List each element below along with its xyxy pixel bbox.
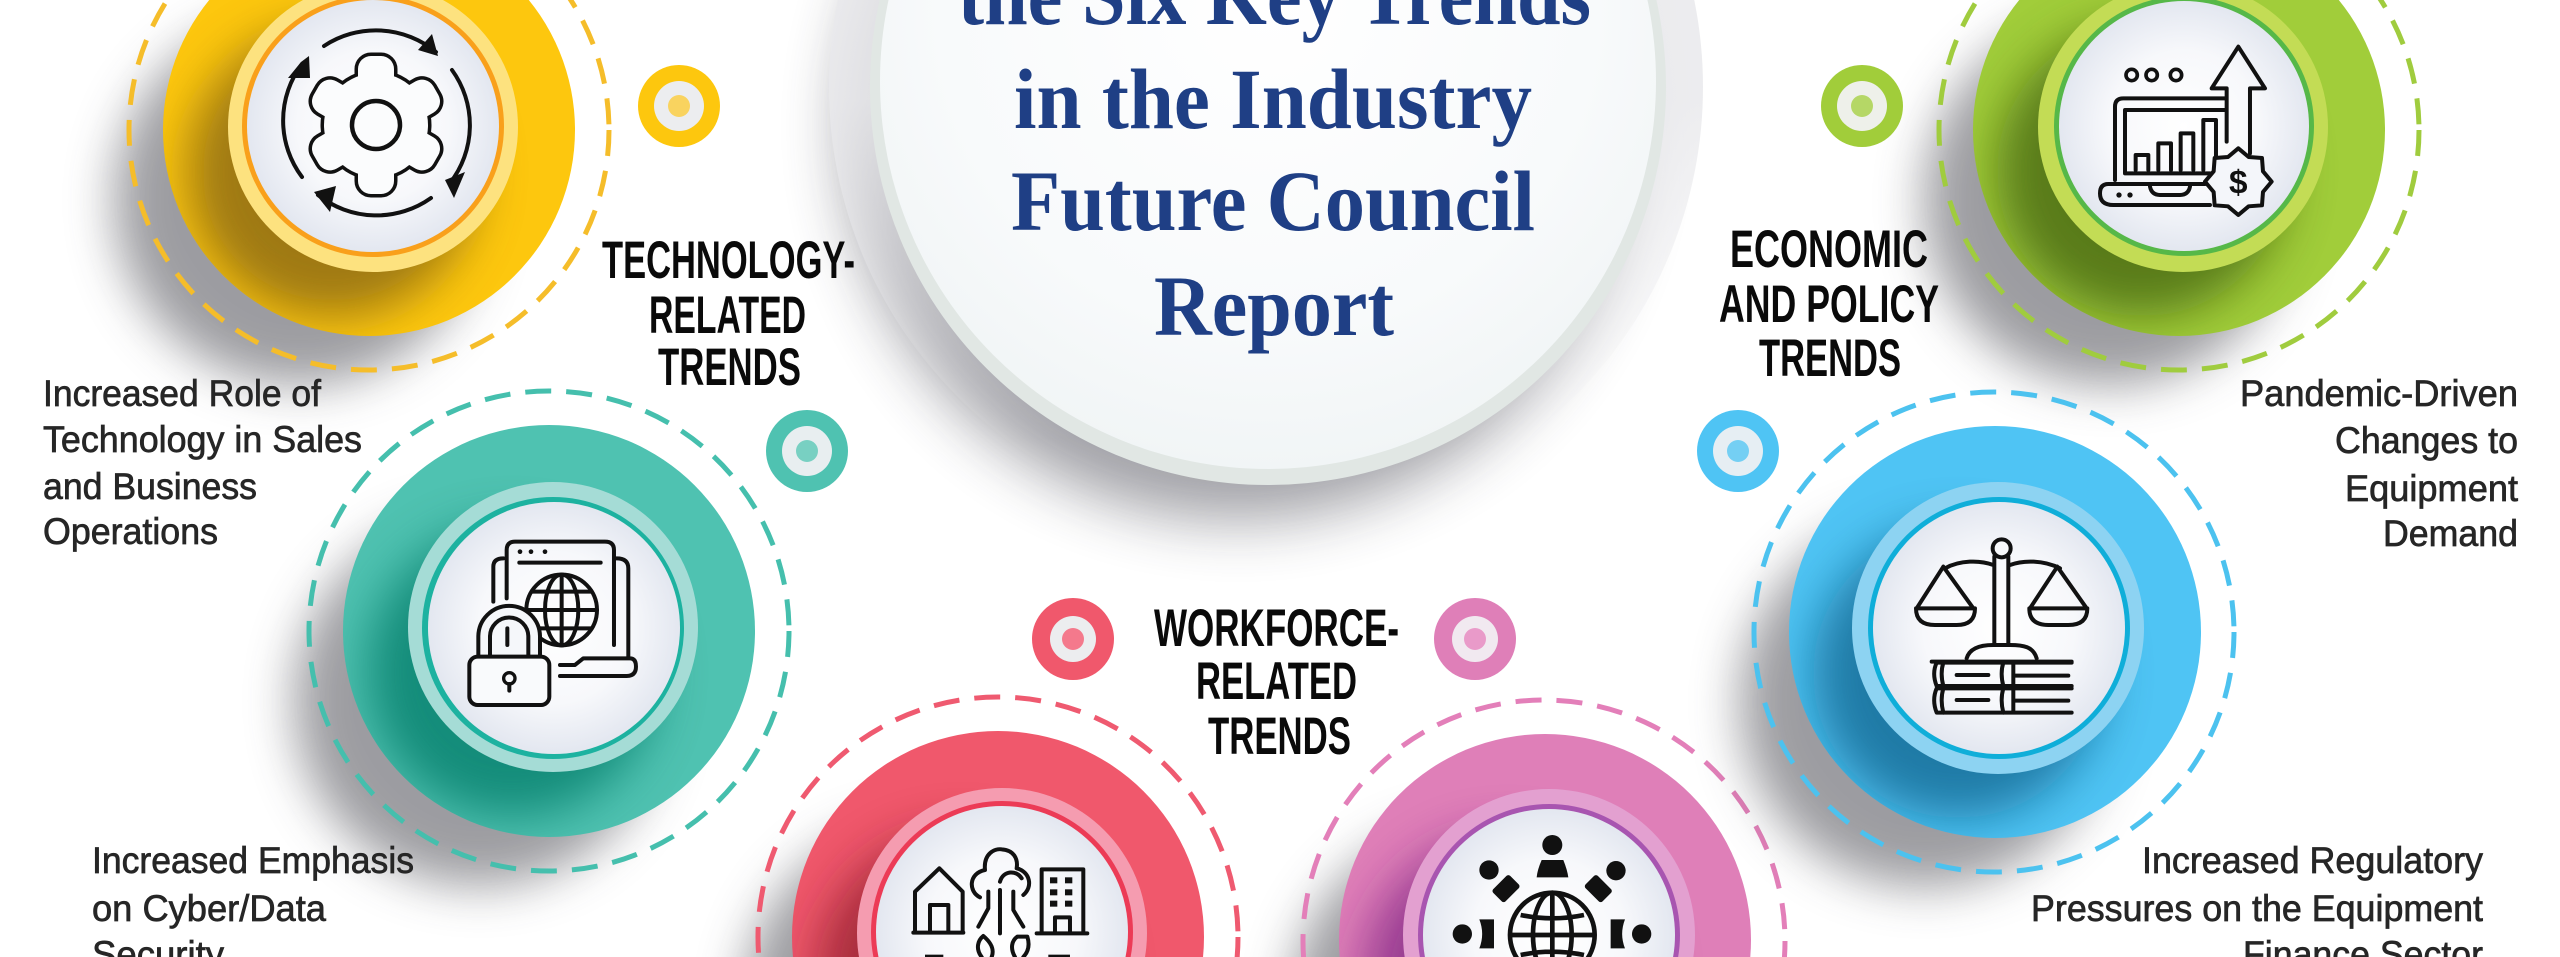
panel: blue trend circle <box>1740 392 2234 887</box>
icon: scales of justice on books <box>1916 539 2087 713</box>
heading: economic and policy trends: ECONOMIC <box>1730 220 1928 279</box>
small dot: red <box>1032 598 1114 680</box>
heading: technology-related trends: TECHNOLOGY- <box>602 231 855 290</box>
heading: technology-related trends <box>602 231 855 397</box>
text: pandemic-driven changes: Equipment <box>2345 468 2519 509</box>
heading: economic and policy trends: TRENDS <box>1759 329 1901 388</box>
icon: laptop chart, arrow and dollar badge: $ <box>2229 164 2248 201</box>
text: regulatory pressures: Increased Regulatory <box>2142 840 2483 881</box>
heading: workforce-related trends <box>1154 599 1399 766</box>
icon: web page, globe and padlock <box>469 542 636 705</box>
text: cyber and data security <box>92 840 414 957</box>
icon: house, tree and building <box>913 849 1087 957</box>
icon: people around a globe <box>1453 835 1651 957</box>
title: Future Council <box>1011 153 1535 249</box>
panel: green trend circle <box>1924 0 2419 385</box>
text: increased role of technology: Technology in Sales <box>43 419 362 460</box>
text: pandemic-driven changes: Demand <box>2383 513 2518 554</box>
text: pandemic-driven changes: Changes to <box>2335 420 2518 461</box>
heading: economic and policy trends <box>1719 220 1939 388</box>
text: cyber and data security: on Cyber/Data <box>92 888 326 929</box>
panel: yellow trend circle <box>114 0 609 385</box>
text: increased role of technology: Increased Role of <box>43 373 322 414</box>
panel: red trend circle <box>743 697 1238 957</box>
text: regulatory pressures <box>2031 840 2484 957</box>
text: cyber and data security: Increased Emphasis <box>92 840 414 881</box>
heading: workforce-related trends: RELATED <box>1196 652 1357 711</box>
title <box>958 0 1591 354</box>
text: pandemic-driven changes: Pandemic-Driven <box>2240 373 2518 414</box>
heading: workforce-related trends: WORKFORCE- <box>1154 599 1399 658</box>
heading: workforce-related trends: TRENDS <box>1208 707 1351 766</box>
panel: central title circle <box>829 0 1703 524</box>
small dot: blue <box>1697 410 1779 492</box>
panel: teal trend circle <box>294 391 789 886</box>
title: in the Industry <box>1014 51 1532 147</box>
title: Report <box>1154 258 1394 354</box>
small dot: green <box>1821 65 1903 147</box>
text: regulatory pressures: Pressures on the Equipment <box>2031 888 2484 929</box>
small dot: teal <box>766 410 848 492</box>
icon: laptop chart, arrow and dollar badge <box>2100 47 2272 215</box>
text: increased role of technology: and Business <box>43 466 257 507</box>
small dot: magenta <box>1434 598 1516 680</box>
small dot: yellow <box>638 65 720 147</box>
text: increased role of technology: Operations <box>43 511 218 552</box>
icon: gear with cycle arrows <box>283 30 470 215</box>
heading: technology-related trends: RELATED <box>649 286 806 345</box>
panel: magenta trend circle <box>1290 700 1785 957</box>
heading: economic and policy trends: AND POLICY <box>1719 275 1939 334</box>
heading: technology-related trends: TRENDS <box>658 338 801 397</box>
text: increased role of technology <box>43 373 362 552</box>
text: pandemic-driven changes <box>2240 373 2519 554</box>
